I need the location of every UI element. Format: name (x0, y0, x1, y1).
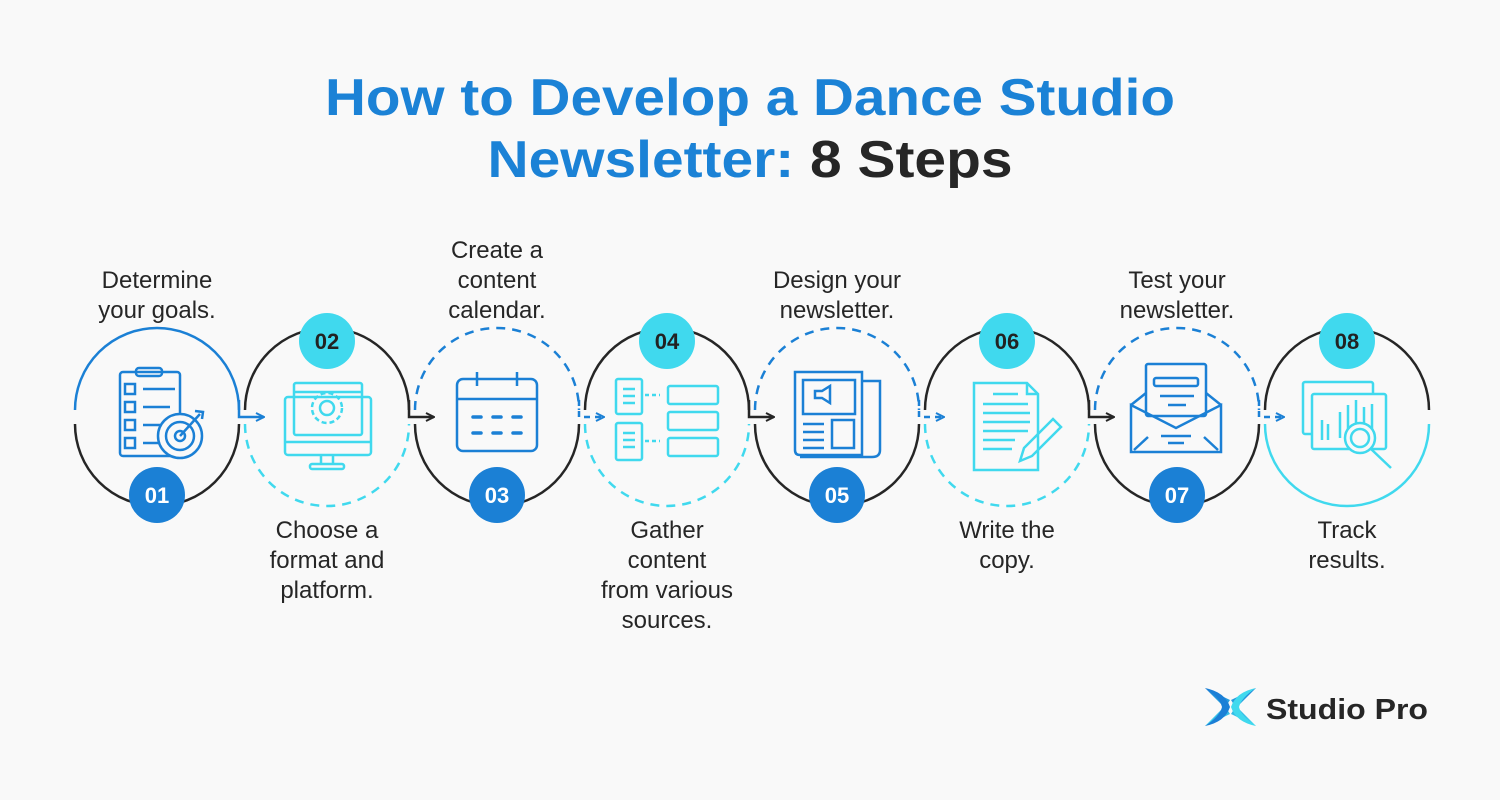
step labels: sources. (622, 607, 712, 634)
icon: analytics magnifier (1303, 382, 1391, 468)
badges (129, 313, 1375, 523)
icon: newsletter with megaphone (795, 372, 880, 457)
badges: 02 (315, 329, 339, 354)
badges: 08 (1335, 329, 1359, 354)
step 06 circle (925, 328, 1089, 506)
step labels: Gather (630, 517, 704, 544)
step labels: content (628, 547, 707, 574)
step labels: Design your (773, 267, 901, 294)
step labels: your goals. (98, 297, 216, 324)
title (325, 69, 1175, 189)
step labels: Determine (102, 267, 212, 294)
step 03 circle (415, 328, 579, 506)
step labels: calendar. (448, 297, 546, 324)
icon: calendar (457, 372, 537, 451)
step labels: Write the (959, 517, 1055, 544)
step labels: Test your (1128, 267, 1226, 294)
logo: Studio Pro: Studio Pro (1266, 694, 1428, 726)
step labels: newsletter. (1120, 297, 1234, 324)
step 05 circle (755, 328, 919, 506)
badges: 06 (995, 329, 1019, 354)
step 04 circle (585, 328, 749, 506)
step 01 circle (75, 328, 239, 506)
icon: monitor with gear (285, 383, 371, 469)
badges: 03 (485, 483, 509, 508)
badges: 05 (825, 483, 849, 508)
step labels (98, 237, 1386, 634)
icon: content sources (616, 379, 718, 460)
icon: document with pencil (974, 383, 1061, 470)
step labels: format and (270, 547, 384, 574)
badges: 07 (1165, 483, 1189, 508)
title: Newsletter: 8 Steps (488, 131, 1012, 189)
icon: envelope (1131, 364, 1221, 452)
icon: checklist with target (120, 368, 203, 458)
step labels: results. (1308, 547, 1386, 574)
step labels: copy. (979, 547, 1035, 574)
title: How to Develop a Dance Studio (325, 69, 1175, 127)
step labels: newsletter. (780, 297, 894, 324)
step 02 circle (245, 328, 409, 506)
badges: 04 (655, 329, 680, 354)
step labels: platform. (280, 577, 374, 604)
step labels: content (458, 267, 537, 294)
step labels: Track (1317, 517, 1378, 544)
badges: 01 (145, 483, 169, 508)
step 08 circle (1265, 328, 1429, 506)
logo: Studio Pro (1205, 688, 1428, 726)
step labels: Choose a (276, 517, 379, 544)
step 07 circle (1095, 328, 1259, 506)
arrows between steps (239, 400, 1284, 417)
step labels: from various (601, 577, 733, 604)
step labels: Create a (451, 237, 544, 264)
